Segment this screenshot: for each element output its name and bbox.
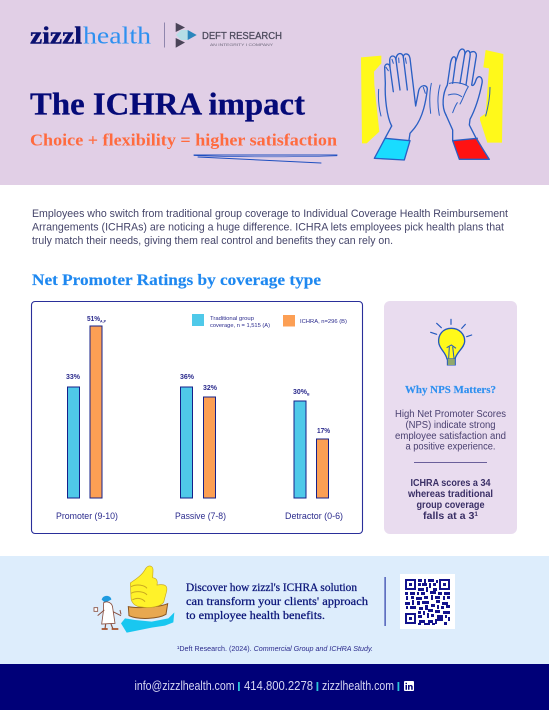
- logo: Deft Research: DEFT RESEARCH: [202, 31, 282, 42]
- bars: Detractor: [294, 401, 328, 498]
- value labels: 51%: [87, 316, 101, 323]
- value labels: [66, 316, 331, 435]
- contact details: 414.800.2278: [244, 678, 313, 693]
- logo: zizzl health: zizzl: [30, 24, 82, 50]
- legend: [192, 314, 347, 329]
- legend: ICHRA, n=296 (B): [300, 319, 347, 325]
- intro text block: truly match their needs, giving them real control and benefits they can rely on.: [32, 235, 393, 247]
- icon: light bulb: [431, 319, 472, 365]
- panel: why NPS matters: [384, 301, 517, 534]
- value labels: 17%: [317, 428, 331, 435]
- illustration: thumbs up statue: [94, 566, 174, 633]
- logo: zizzl health: [30, 24, 151, 50]
- contact details: info@zizzlhealth.com: [134, 678, 234, 693]
- panel: header: [0, 0, 549, 185]
- value labels: B: [307, 392, 310, 396]
- text: call to action: can transform your clients' approach: [186, 596, 368, 608]
- category labels: Detractor (0-6): [285, 511, 343, 522]
- value labels: 33%: [66, 374, 81, 381]
- logo: Deft Research: [164, 22, 282, 48]
- section heading: Net Promoter Ratings by coverage type: [32, 272, 321, 289]
- text: ICHRA score: falls at a 3: [423, 511, 471, 522]
- text: ICHRA score: group coverage: [416, 500, 485, 511]
- value labels: 36%: [180, 374, 195, 381]
- illustration: high five hands: [361, 49, 503, 160]
- legend: coverage, n = 1,515 (A): [210, 323, 270, 329]
- intro text block: [32, 208, 509, 247]
- text: NPS explanation: High Net Promoter Scores: [395, 409, 506, 420]
- value labels: A,P: [100, 320, 107, 324]
- category labels: Promoter (9-10): [56, 511, 118, 522]
- category labels: Passive (7-8): [175, 511, 226, 522]
- value labels: 30%: [293, 389, 308, 396]
- logo: zizzl health: health: [83, 24, 151, 50]
- footnote: ¹Deft Research. (2024). Commercial Group and ICHRA Study.: [177, 644, 373, 653]
- contact details: [134, 678, 399, 693]
- category labels: [56, 511, 343, 522]
- text: ICHRA score: [407, 478, 493, 522]
- bars: Passive: [180, 387, 216, 498]
- value labels: 32%: [203, 385, 218, 392]
- text: ICHRA score: ICHRA scores a 34: [410, 478, 491, 489]
- legend: Traditional group: [210, 316, 254, 322]
- underline scribble: [194, 155, 337, 163]
- text: call to action: Discover how zizzl's ICHRA solution: [186, 582, 357, 594]
- bars: Promoter: [68, 326, 102, 498]
- icon: LinkedIn: [404, 681, 414, 691]
- intro text block: Arrangements (ICHRAs) are noticing a huge difference. ICHRA lets employees pick health plans that: [32, 222, 505, 234]
- text: NPS explanation: employee satisfaction and: [395, 431, 506, 442]
- heading: why NPS matters: Why NPS Matters?: [405, 385, 496, 396]
- logo: Deft Research: AN INTEGRITY I COMPANY: [210, 43, 274, 47]
- text: NPS explanation: [395, 409, 506, 452]
- text: NPS explanation: a positive experience.: [406, 442, 496, 452]
- contact details: zizzlhealth.com: [322, 678, 394, 693]
- text: ICHRA score: whereas traditional: [407, 489, 493, 500]
- text: call to action: [186, 582, 368, 622]
- text: call to action: to employee health benefits.: [186, 610, 325, 622]
- text: NPS explanation: (NPS) indicate strong: [406, 420, 496, 431]
- subtitle: Choice + flexibility = higher satisfaction: [30, 130, 338, 150]
- title: The ICHRA impact: [30, 86, 305, 122]
- panel: call to action: [0, 556, 549, 664]
- bar chart: Net Promoter Ratings: [32, 302, 362, 534]
- intro text block: Employees who switch from traditional group coverage to Individual Coverage Health Reimbursement: [32, 208, 509, 220]
- QR code: [400, 574, 455, 629]
- text: ICHRA score: 1: [474, 512, 479, 518]
- panel: footer: [0, 664, 549, 710]
